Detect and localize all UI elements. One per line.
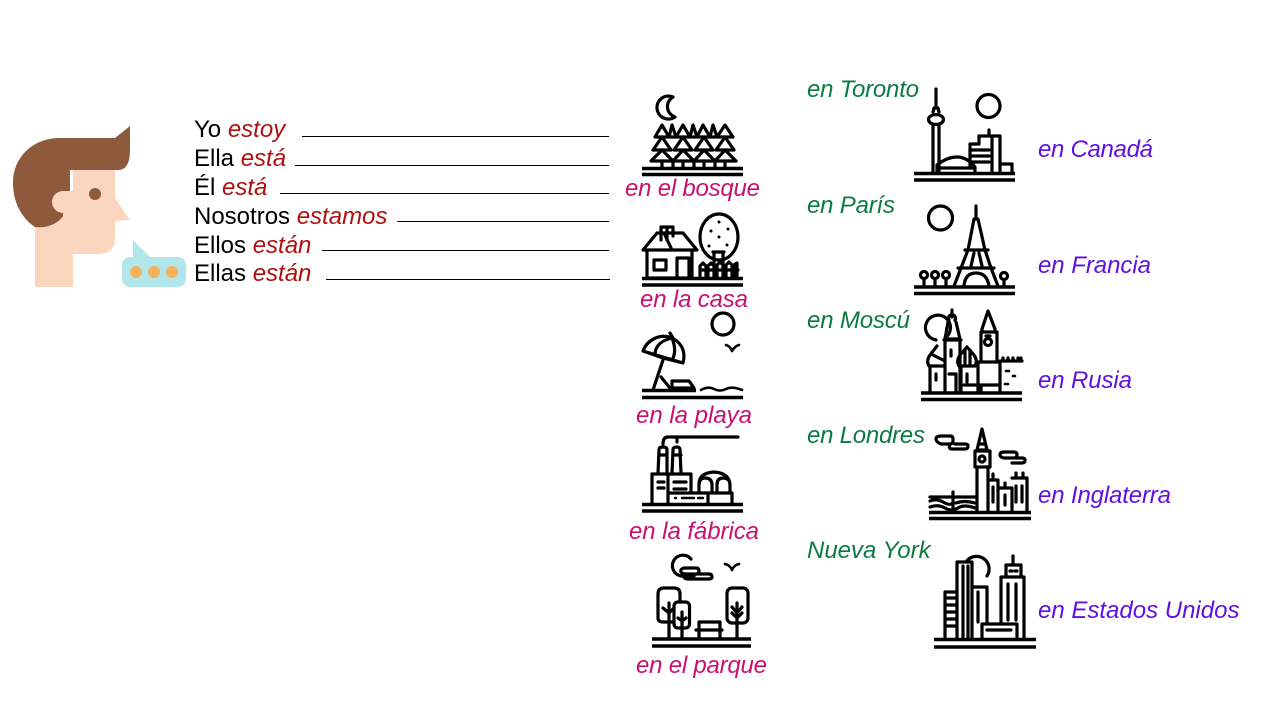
conjugation list with writing lines: Ellos están bbox=[194, 232, 311, 259]
icon: Paris skyline bbox=[914, 206, 1015, 294]
conjugation list with writing lines: Nosotros estamos bbox=[194, 203, 387, 230]
conjugation list with writing lines: Él está bbox=[194, 174, 267, 201]
label: en la casa: en la casa bbox=[640, 286, 748, 313]
conjugation list with writing lines: Yo estoy bbox=[194, 116, 287, 143]
icon: New York skyline bbox=[934, 556, 1036, 647]
label: en el parque: en el parque bbox=[636, 652, 767, 679]
label: en la fábrica: en la fábrica bbox=[629, 518, 759, 545]
icon: factory bbox=[642, 437, 743, 511]
label: en Moscú: en Moscú bbox=[807, 307, 910, 334]
conjugation list with writing lines: Ellas están bbox=[194, 260, 311, 287]
label: en el bosque: en el bosque bbox=[625, 175, 760, 202]
icon: house bbox=[642, 214, 743, 285]
label: en Rusia: en Rusia bbox=[1038, 367, 1132, 394]
conjugation list with writing lines bbox=[194, 116, 610, 287]
label: en Canadá: en Canadá bbox=[1038, 136, 1153, 163]
icon: Moscow skyline bbox=[921, 310, 1022, 400]
icon: forest bbox=[642, 96, 743, 174]
label: en Inglaterra: en Inglaterra bbox=[1038, 482, 1171, 509]
label: en Francia: en Francia bbox=[1038, 252, 1151, 279]
label: en la playa: en la playa bbox=[636, 402, 752, 429]
icon: man speaking bbox=[13, 126, 186, 287]
conjugation list with writing lines: Ella está bbox=[194, 145, 286, 172]
label: en Estados Unidos: en Estados Unidos bbox=[1038, 597, 1239, 624]
icon: beach bbox=[642, 313, 743, 398]
icon: park bbox=[652, 555, 751, 646]
label: en Toronto: en Toronto bbox=[807, 76, 919, 103]
label: Nueva York: Nueva York bbox=[807, 537, 933, 564]
speech bubble bbox=[122, 240, 186, 287]
icon: Toronto skyline bbox=[914, 89, 1015, 180]
icon: London skyline bbox=[929, 429, 1031, 518]
label: en París: en París bbox=[807, 192, 895, 219]
label: en Londres: en Londres bbox=[807, 422, 925, 449]
